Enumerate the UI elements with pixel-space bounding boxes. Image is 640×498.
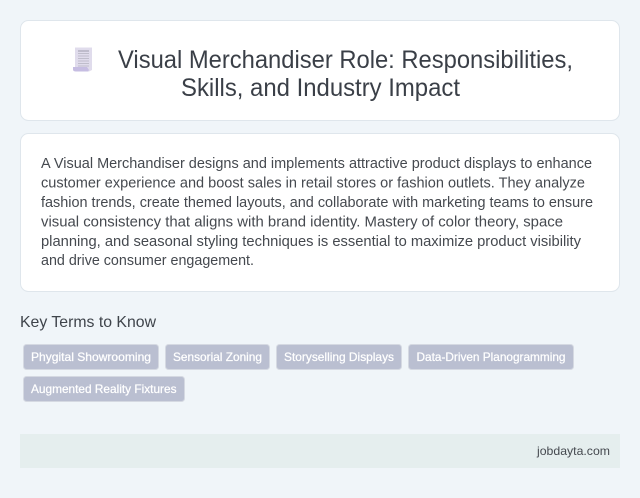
footer bar <box>20 434 620 468</box>
description text: A Visual Merchandiser designs and implements attractive product displays to enhance <box>41 156 592 172</box>
panel: description <box>20 134 620 292</box>
tag: Storyselling Displays: Storyselling Displays <box>284 350 394 364</box>
title: Skills, and Industry Impact <box>181 74 460 102</box>
icon: document <box>73 48 92 72</box>
description text: fashion trends, create themed layouts, and collaborate with marketing teams to ensure <box>41 195 593 211</box>
description text: customer experience and boost sales in retail stores or fashion outlets. They analyze <box>41 176 585 192</box>
tag: Augmented Reality Fixtures: Augmented Reality Fixtures <box>31 382 176 396</box>
panel: title card <box>20 20 620 120</box>
title <box>118 46 573 102</box>
description text: and drive consumer engagement. <box>41 253 254 269</box>
description text: visual consistency that aligns with brand identity. Mastery of color theory, space <box>41 214 563 230</box>
tag: Storyselling Displays <box>276 344 402 370</box>
tag: Sensorial Zoning <box>166 344 270 370</box>
tag: Augmented Reality Fixtures <box>24 376 184 402</box>
tag: Sensorial Zoning: Sensorial Zoning <box>173 350 262 364</box>
description text: planning, and seasonal styling techniques is essential to maximize product visibility <box>41 234 582 250</box>
footer source: jobdayta.com <box>536 444 610 458</box>
heading: key terms: Key Terms to Know <box>20 314 156 331</box>
description text <box>41 156 593 269</box>
tag: Phygital Showrooming: Phygital Showrooming <box>31 350 151 364</box>
tag: Data-Driven Planogramming <box>408 344 574 370</box>
title: Visual Merchandiser Role: Responsibilities, <box>118 46 573 74</box>
tag: Phygital Showrooming <box>24 344 158 370</box>
tag: Data-Driven Planogramming: Data-Driven Planogramming <box>416 350 566 364</box>
